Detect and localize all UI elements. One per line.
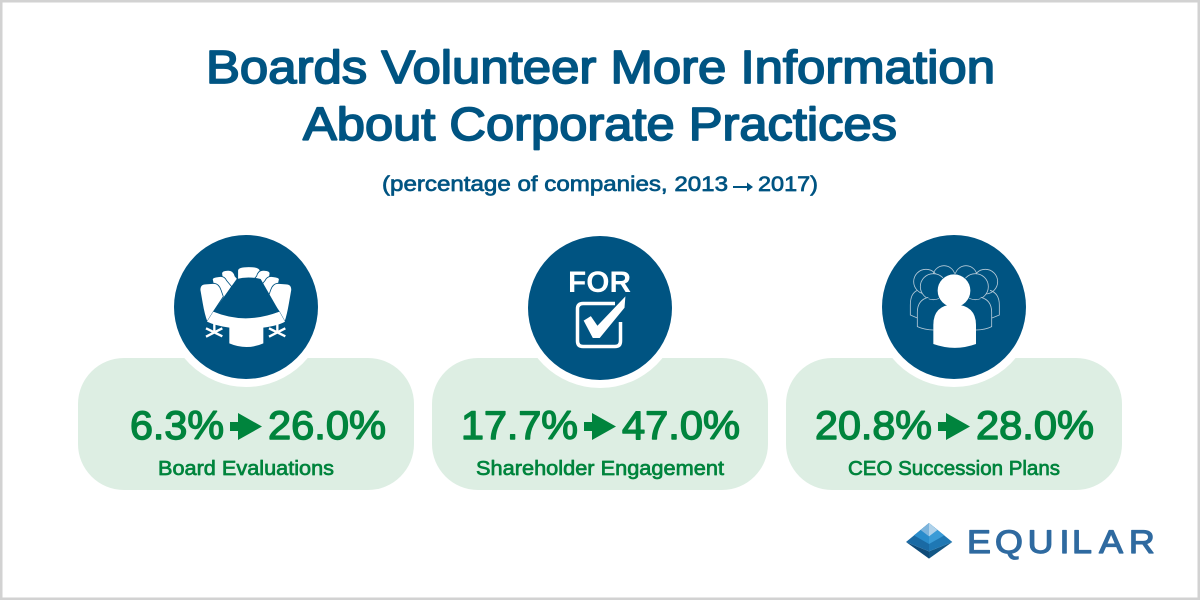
value: 17.7% to 47.0%: 17.7% [461, 404, 578, 448]
panel: CEO succession plans [786, 227, 1122, 490]
value: 20.8% to 28.0%: 20.8% [815, 404, 932, 448]
subtitle [382, 173, 818, 196]
value: 6.3% to 26.0% [130, 404, 386, 448]
logo: Equilar [906, 523, 1155, 561]
value: 20.8% to 28.0% [815, 404, 1094, 448]
title: About Corporate Practices [303, 98, 897, 150]
icon: FOR checkbox: FOR [568, 266, 631, 299]
label: CEO succession plans: CEO Succession Plans [848, 458, 1060, 480]
panel: board evaluations [78, 227, 414, 490]
wordmark: EQUILAR [967, 525, 1155, 561]
value: 6.3% to 26.0%: 26.0% [268, 404, 386, 448]
value: 20.8% to 28.0%: 28.0% [976, 404, 1094, 448]
label: board evaluations: Board Evaluations [158, 458, 334, 480]
icon: group of people [910, 266, 999, 348]
title [206, 41, 995, 150]
value: 17.7% to 47.0% [461, 404, 740, 448]
label: shareholder engagement: Shareholder Engagement [476, 458, 724, 480]
value: 17.7% to 47.0%: 47.0% [622, 404, 740, 448]
subtitle: 2017) [758, 173, 818, 196]
icon: pyramid [906, 523, 952, 559]
title: Boards Volunteer More Information [206, 41, 995, 93]
value: 6.3% to 26.0%: 6.3% [130, 404, 224, 448]
icon: FOR checkbox [568, 266, 631, 346]
panel: shareholder engagement [432, 228, 768, 490]
subtitle: (percentage of companies, 2013 [382, 173, 728, 196]
icon: boardroom table [200, 267, 292, 347]
